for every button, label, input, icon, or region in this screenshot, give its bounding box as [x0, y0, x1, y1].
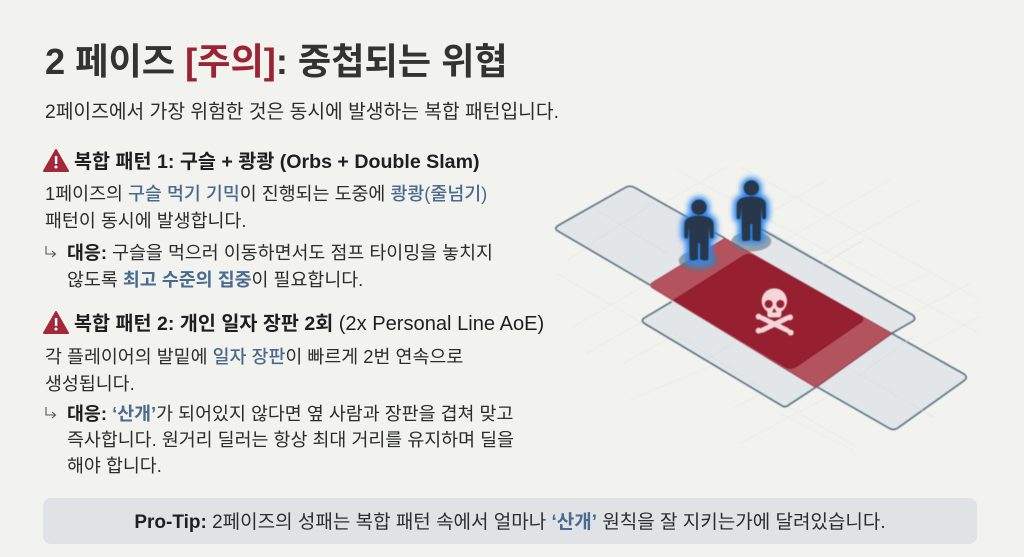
overlap: light red band	[651, 238, 892, 387]
overlap: dark red danger zone	[674, 254, 863, 368]
description: pattern 1: 패턴이 동시에 발생합니다.	[45, 210, 246, 231]
strip: lower-right line AoE	[817, 333, 966, 430]
player: front figure	[679, 200, 719, 271]
response: pattern 2: 즉사합니다. 원거리 딜러는 항상 최대 거리를 유지하며 딜을	[67, 429, 514, 450]
description: pattern 2	[45, 346, 463, 394]
callout text: Pro-Tip: 2페이즈의 성패는 복합 패턴 속에서 얼마나 ‘산개’ 원칙을 잘 지키는가에 달려있습니다.	[134, 512, 886, 533]
title: 2 페이즈 [주의]: 중첩되는 위협	[45, 41, 508, 82]
response: pattern 2	[67, 403, 514, 476]
icon: warning triangle 2	[43, 311, 69, 334]
heading: pattern 2: 복합 패턴 2: 개인 일자 장판 2회 (2x Personal Line AoE)	[74, 312, 544, 334]
response: pattern 1	[67, 242, 493, 290]
description: pattern 1	[45, 183, 487, 231]
heading: pattern 1: 복합 패턴 1: 구슬 + 쾅쾅 (Orbs + Double Slam)	[74, 150, 480, 172]
icon: warning triangle 1	[43, 149, 69, 172]
panel: pattern 1	[43, 149, 493, 290]
description: pattern 2: 각 플레이어의 발밑에 일자 장판이 빠르게 2번 연속으로	[45, 346, 463, 367]
callout: pro tip	[43, 498, 977, 544]
description: pattern 2: 생성됩니다.	[45, 373, 135, 394]
response: pattern 2: 대응: ‘산개’가 되어있지 않다면 옆 사람과 장판을 겹쳐 맞고	[67, 403, 513, 424]
player: back figure	[731, 180, 771, 251]
icon: reply arrow 1	[45, 246, 56, 258]
diagram: overlapping line AoE	[554, 172, 968, 431]
strip: upper-left line AoE	[556, 186, 863, 369]
subtitle: 2페이즈에서 가장 위험한 것은 동시에 발생하는 복합 패턴입니다.	[45, 102, 559, 123]
response: pattern 1: 대응: 구슬을 먹으러 이동하면서도 점프 타이밍을 놓치지	[67, 242, 493, 263]
description: pattern 1: 1페이즈의 구슬 먹기 기믹이 진행되는 도중에 쾅쾅(줄넘기)	[45, 183, 487, 204]
icon: reply arrow 2	[45, 407, 56, 418]
strip: middle line AoE	[642, 228, 915, 407]
panel: pattern 2	[43, 311, 544, 476]
icon: skull and crossbones	[756, 288, 794, 336]
response: pattern 1: 않도록 최고 수준의 집중이 필요합니다.	[67, 269, 363, 290]
response: pattern 2: 해야 합니다.	[67, 455, 162, 476]
